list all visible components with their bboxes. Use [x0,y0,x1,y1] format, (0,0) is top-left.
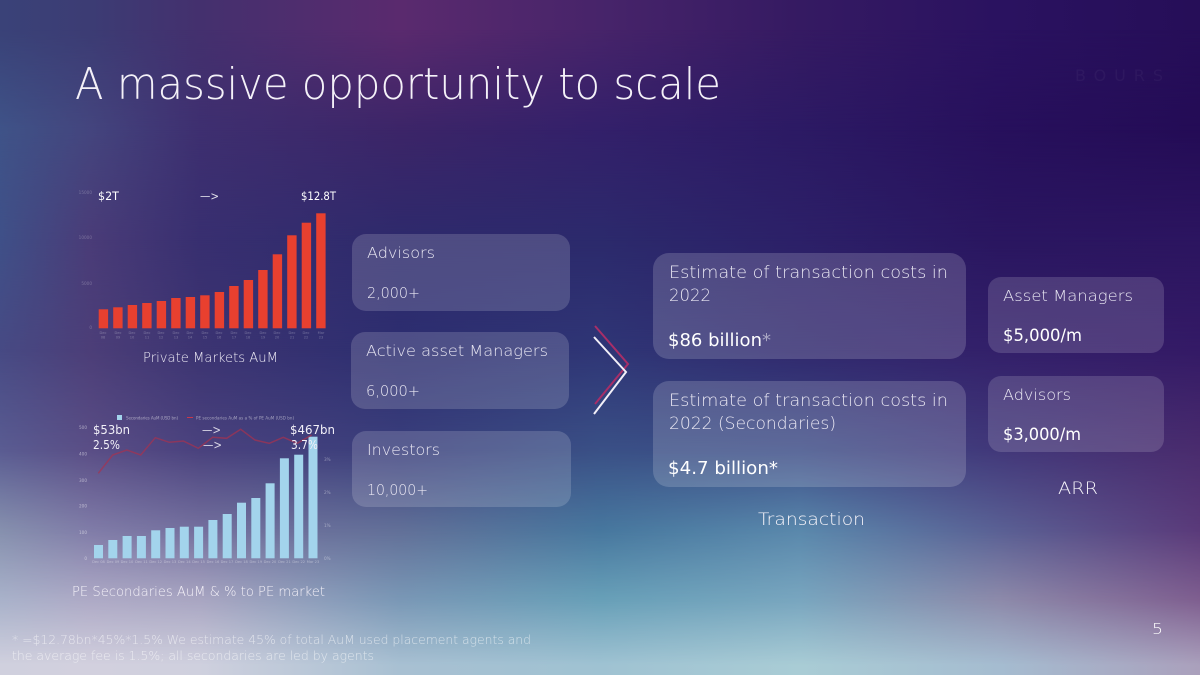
red bars [99,213,326,328]
panel: asset managers ARR: $5,000/m [1003,326,1082,346]
x axis labels: Mar 23 [307,560,319,564]
faint logo wordmark: BOURS [1075,66,1163,85]
left axis labels: 300 [79,478,87,483]
panel: investors: Investors [367,441,440,459]
x axis labels: Dec [231,331,237,335]
left axis labels: 100 [79,530,87,535]
chart caption: PE secondaries: PE Secondaries AuM & % to PE market [72,585,325,600]
footnote: * =$12.78bn*45%*1.5% We estimate 45% of total AuM used placement agents and [12,632,531,647]
x axis labels: Dec 10 [121,560,134,564]
x axis labels [92,560,319,564]
x axis labels: 14 [188,336,193,340]
right axis labels: 0% [324,556,331,561]
panel: transaction costs secondaries [653,381,966,487]
x axis labels: 21 [290,336,294,340]
x axis labels: 08 [101,336,106,340]
x axis labels: 17 [232,336,236,340]
panel: asset managers ARR: Asset Managers [1003,287,1133,305]
right axis labels: 1% [324,523,331,528]
left axis labels: 0 [84,556,87,561]
panel: transaction costs 2022: 2022 [669,286,711,306]
x axis labels: Dec 09 [107,560,120,564]
x axis labels: Dec [274,331,280,335]
x axis labels: 20 [275,336,280,340]
left axis labels: 400 [79,452,87,456]
panel: advisors ARR [988,376,1164,452]
x axis labels: Dec [245,331,251,335]
x axis labels: Dec [115,331,121,335]
panel: transaction costs secondaries: Estimate of transaction costs in [669,391,948,411]
panel: transaction costs 2022 [653,253,966,359]
x axis labels: Dec [144,331,150,335]
x axis labels: Dec [100,331,106,335]
x axis labels: 15 [203,336,207,340]
y axis labels [79,190,92,330]
red percentage line [98,429,312,473]
panel: advisors ARR: Advisors [1003,386,1071,404]
x axis labels: Dec 21 [278,560,291,564]
x axis labels: Dec [216,331,222,335]
x axis labels: 18 [246,336,251,340]
x axis labels: Dec 17 [221,560,233,564]
panel: transaction costs 2022: Estimate of transaction costs in [669,263,948,283]
x axis labels: Mar [318,331,325,335]
panel: investors [352,431,571,507]
panel: advisors [352,234,570,311]
y axis labels: 15000 [79,190,92,195]
growth labels: 3.7% [291,438,318,452]
x axis labels: Dec 14 [178,560,191,564]
x axis labels: 11 [145,336,149,340]
label: transaction: Transaction [758,510,865,530]
x axis labels [100,331,325,340]
icon: double chevron arrow [594,326,628,414]
x axis labels: 09 [116,336,121,340]
panel: active asset managers: Active asset Managers [366,342,548,360]
x axis labels: Dec [173,331,179,335]
panel: active asset managers [351,332,569,409]
x axis labels: 12 [159,336,163,340]
x axis labels: 22 [304,336,308,340]
right axis labels: 3% [324,457,331,462]
x axis labels: Dec 13 [164,560,176,564]
growth labels: —> [200,189,219,203]
growth labels: $2T [98,189,120,203]
legend: PE secondaries AuM as a % of PE AuM (USD bn) [196,416,294,420]
growth labels [98,189,337,203]
growth labels: 2.5% [93,438,120,452]
x axis labels: 16 [217,336,222,340]
x axis labels: Dec [187,331,193,335]
x axis labels: Dec 12 [149,560,162,564]
footnote: the average fee is 1.5%; all secondaries are led by agents [12,648,374,663]
x axis labels: Dec 19 [249,560,263,564]
panel: transaction costs secondaries: $4.7 billion* [668,458,778,479]
x axis labels: 19 [261,336,266,340]
panel: advisors: 2,000+ [367,284,420,302]
blue bars [94,437,318,558]
panel: advisors ARR: $3,000/m [1003,425,1081,445]
chart caption: private markets: Private Markets AuM [143,351,278,366]
legend [117,415,294,420]
left axis labels [79,425,87,561]
panel: active asset managers: 6,000+ [366,382,420,400]
growth labels: $12.8T [301,189,337,203]
x axis labels: Dec 20 [264,560,277,564]
y axis labels: 0 [89,325,92,330]
growth labels: —> [202,423,221,437]
growth labels: $53bn [93,423,130,437]
x axis labels: 13 [174,336,178,340]
y axis labels: 5000 [81,281,92,286]
x axis labels: Dec 22 [292,560,305,564]
left axis labels: 200 [79,504,87,508]
x axis labels: Dec 11 [135,560,148,564]
panel: advisors: Advisors [367,244,435,262]
x axis labels: Dec [289,331,295,335]
title: A massive opportunity to scale [75,59,721,110]
panel: asset managers ARR [988,277,1164,353]
y axis labels: 10000 [79,235,92,240]
left axis labels: 500 [79,425,87,430]
x axis labels: Dec 08 [92,560,106,564]
panel: transaction costs 2022: $86 billion* [668,330,771,351]
combo chart: PE secondaries AuM [79,415,335,564]
x axis labels: Dec 15 [192,560,205,564]
growth labels: —> [203,438,222,452]
x axis labels: Dec [303,331,309,335]
footnote [12,632,531,663]
panel: investors: 10,000+ [367,481,428,499]
x axis labels: 23 [319,336,323,340]
x axis labels: Dec [129,331,135,335]
legend: Secondaries AuM (USD bn) [126,416,178,420]
panel: transaction costs secondaries: 2022 (Secondaries) [669,414,836,434]
x axis labels: 10 [130,336,135,340]
bar chart: private markets AuM [79,189,337,340]
right axis labels [324,457,331,561]
x axis labels: Dec 16 [207,560,220,564]
right axis labels: 2% [324,490,331,495]
label: ARR: ARR [1058,479,1098,499]
x axis labels: Dec 18 [235,560,249,564]
x axis labels: Dec [202,331,208,335]
growth labels: $467bn [290,423,335,437]
page number: 5 [1152,620,1163,638]
x axis labels: Dec [158,331,164,335]
x axis labels: Dec [260,331,266,335]
growth labels [93,423,335,452]
